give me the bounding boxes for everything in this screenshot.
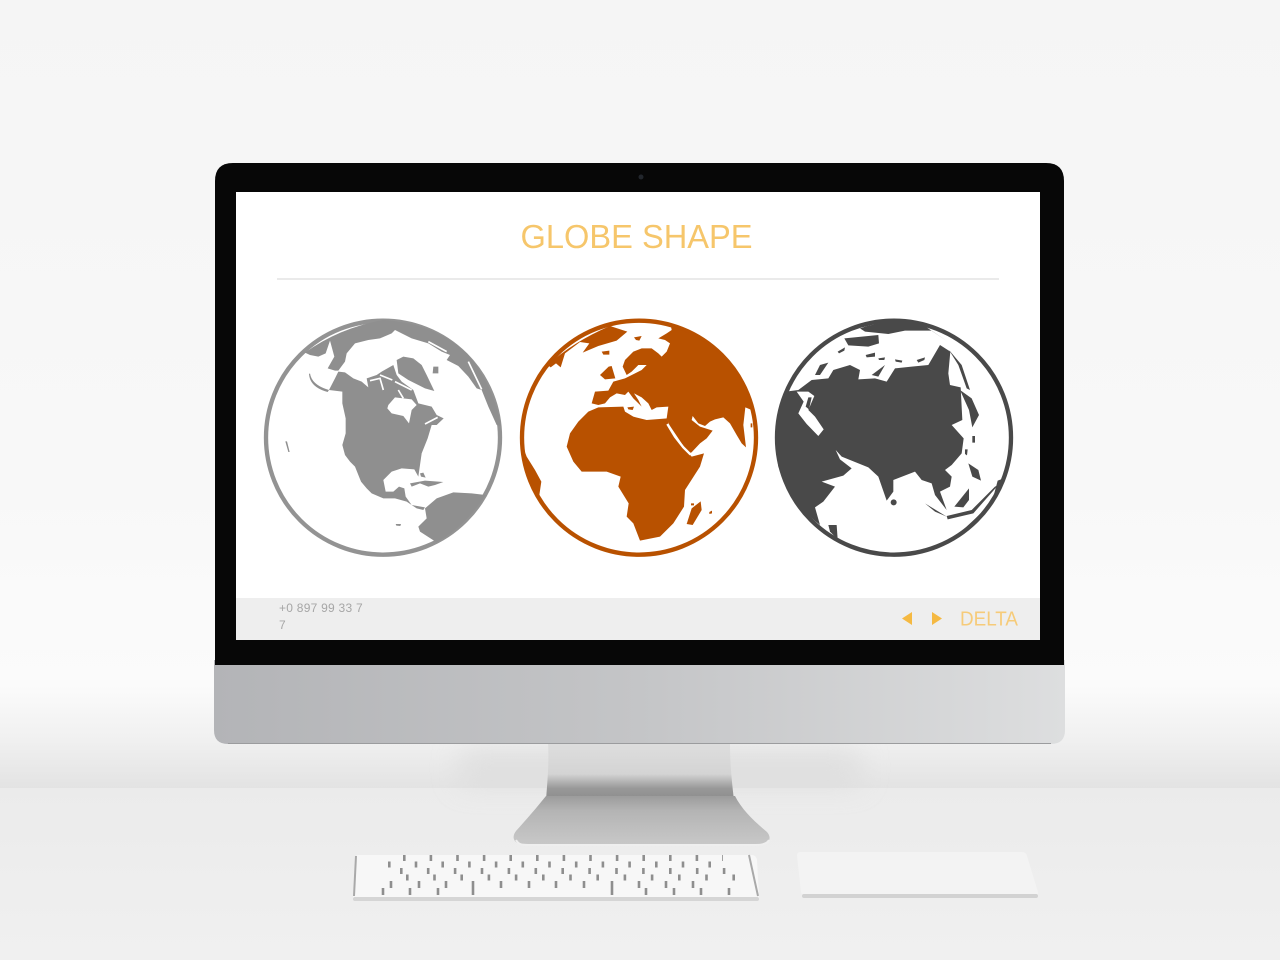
rim sea slits (428, 342, 482, 389)
next arrow (932, 612, 942, 625)
phone number: +0 897 99 33 7 (279, 601, 363, 615)
globe: Africa and Europe (orange) (521, 321, 756, 555)
monitor stand (514, 742, 770, 845)
Madagascar (687, 501, 702, 525)
previous arrow (902, 612, 912, 625)
South America (418, 492, 486, 542)
North America (329, 365, 444, 510)
webcam (638, 174, 644, 180)
Philippines (968, 463, 981, 481)
footer bar (236, 598, 1040, 640)
monitor bezel (215, 163, 1064, 665)
New Guinea chain (947, 485, 998, 519)
brand label: DELTA (960, 608, 1019, 630)
Alaska peninsula (309, 373, 329, 392)
globe: Asia (dark grey) (776, 321, 1011, 555)
stand foot (514, 796, 770, 845)
stand neck (546, 742, 734, 800)
inland seas (797, 392, 824, 436)
South America (521, 442, 542, 502)
globe: Americas (grey) (266, 320, 501, 555)
desk surface (0, 788, 1280, 960)
Iceland (602, 351, 609, 355)
Arctic islands (433, 367, 438, 373)
Asia and Africa (776, 345, 964, 525)
arctic and Eurasia rim (305, 320, 501, 426)
trackpad (797, 852, 1038, 898)
Madagascar (828, 525, 838, 539)
Sumatra (925, 503, 947, 517)
Svalbard (634, 336, 642, 341)
screen (236, 192, 1040, 640)
Australia (958, 478, 1006, 535)
Borneo (954, 488, 969, 507)
monitor body (214, 163, 1065, 744)
keyboard (353, 855, 759, 901)
Galapagos (396, 524, 401, 526)
Hawaii (285, 441, 290, 452)
Sicily and islands (627, 407, 634, 410)
Greenland (548, 326, 627, 367)
monitor chin (214, 660, 1065, 744)
Africa (567, 407, 704, 541)
phone number: 7 (279, 618, 286, 632)
small islands (691, 423, 752, 514)
Novaya Zemlya and arctic rim (844, 335, 879, 347)
Caribbean islands (410, 481, 443, 487)
British Isles (600, 366, 615, 379)
Greenland (397, 357, 434, 391)
Canadian Arctic channels (352, 375, 438, 482)
Eurasia (592, 327, 756, 454)
Sri Lanka (891, 499, 897, 505)
Red Sea (667, 424, 703, 454)
monitor shadow on wall (460, 750, 860, 784)
title: GLOBE SHAPE (520, 219, 752, 256)
Hudson Bay (387, 397, 417, 423)
Japan and Kamchatka arc (949, 350, 970, 390)
